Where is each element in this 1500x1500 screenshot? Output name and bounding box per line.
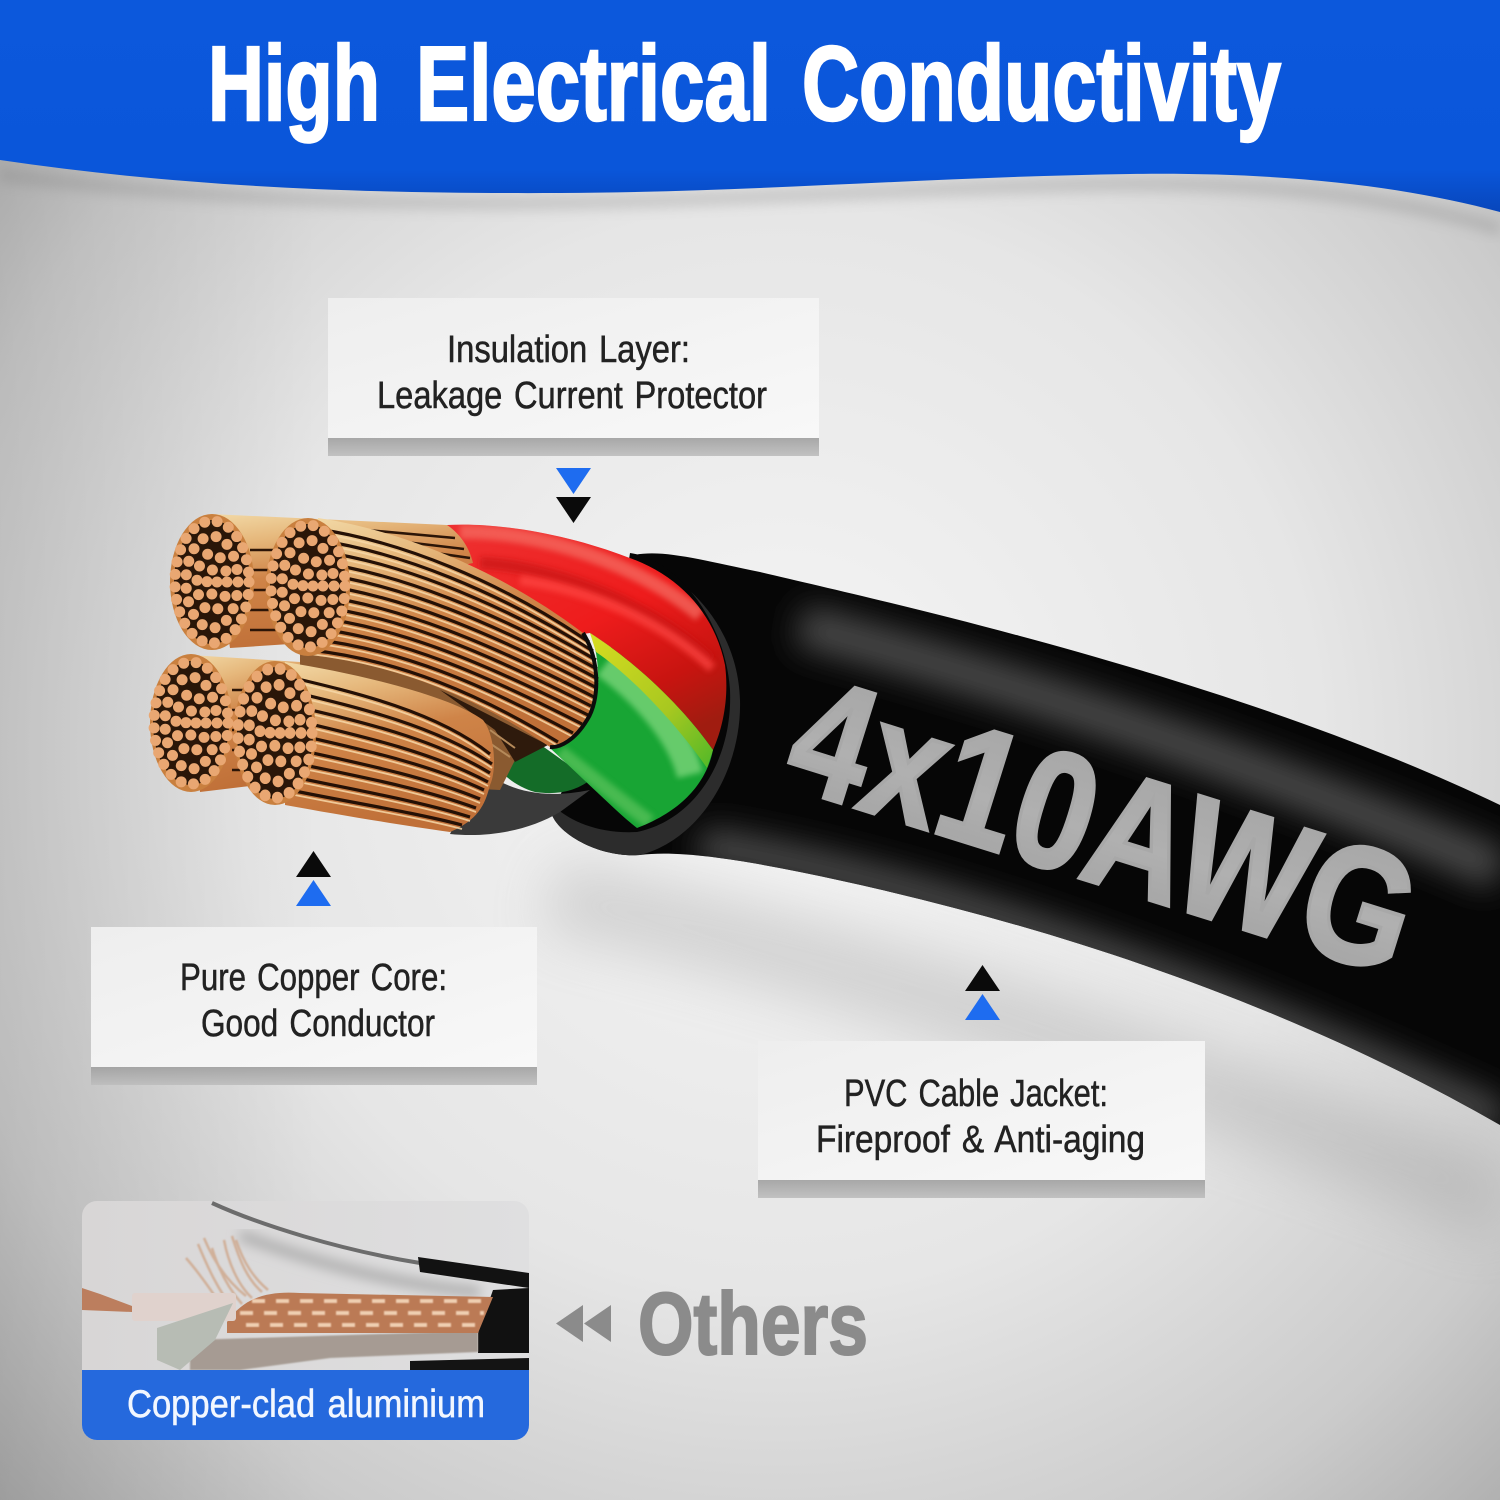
arrows: insulation layer: [556, 468, 591, 523]
black sheath block: [478, 1288, 529, 1353]
lower black stripe: [410, 1358, 529, 1370]
PVC cable jacket: [552, 553, 1500, 1125]
inner green wire rear: [493, 730, 590, 793]
green insulation: [550, 633, 713, 828]
silver foil: [157, 1303, 233, 1370]
title: High: [208, 25, 380, 143]
arrows: copper core: [296, 851, 331, 906]
arrow: double chevron left: [556, 1305, 611, 1342]
comparison photo: copper-clad aluminium: [82, 1201, 529, 1440]
callout: insulation layer: Insulation Layer:: [447, 329, 690, 371]
copper core face, rear bottom: [150, 654, 232, 792]
inner black wire: [450, 770, 590, 835]
callout: copper core: [91, 927, 537, 1085]
title: [208, 25, 1281, 143]
callout: insulation layer: Leakage Current Protector: [377, 375, 767, 417]
callout: copper core: Good Conductor: [201, 1003, 435, 1045]
arrows: cable jacket: [965, 965, 1000, 1020]
background left shading: [0, 0, 320, 1500]
wire shadow: [240, 1235, 480, 1292]
callout: copper core: Pure Copper Core:: [180, 957, 447, 999]
copper tip: [82, 1288, 132, 1312]
grey insulation: [190, 1331, 478, 1370]
title: Conductivity: [802, 25, 1281, 143]
thin wire: [212, 1203, 420, 1263]
frayed braid strands: [186, 1236, 268, 1312]
caption: Copper-clad aluminium: [127, 1383, 485, 1426]
title: Electrical: [416, 25, 771, 143]
cable shadow: [540, 860, 1500, 1240]
rear copper strands, top: [210, 514, 473, 648]
header banner: [0, 0, 1500, 236]
cable illustration: [150, 514, 1500, 1125]
callout: PVC jacket: Fireproof & Anti-aging: [816, 1119, 1145, 1161]
label: Others: Others: [638, 1274, 868, 1373]
callout: PVC jacket: PVC Cable Jacket:: [844, 1073, 1108, 1115]
caption band: [82, 1370, 529, 1440]
callout: insulation layer: [328, 298, 819, 456]
white core: [132, 1293, 236, 1321]
front copper conductor, bottom: [234, 661, 494, 832]
copper braid: [227, 1293, 493, 1333]
rear copper strands, bottom: [190, 645, 548, 792]
red insulation: [440, 525, 726, 750]
black sheath: [418, 1257, 529, 1288]
copper core face, rear top: [170, 514, 254, 650]
front copper conductor, top: [266, 518, 598, 747]
callout: PVC jacket: [758, 1041, 1205, 1198]
